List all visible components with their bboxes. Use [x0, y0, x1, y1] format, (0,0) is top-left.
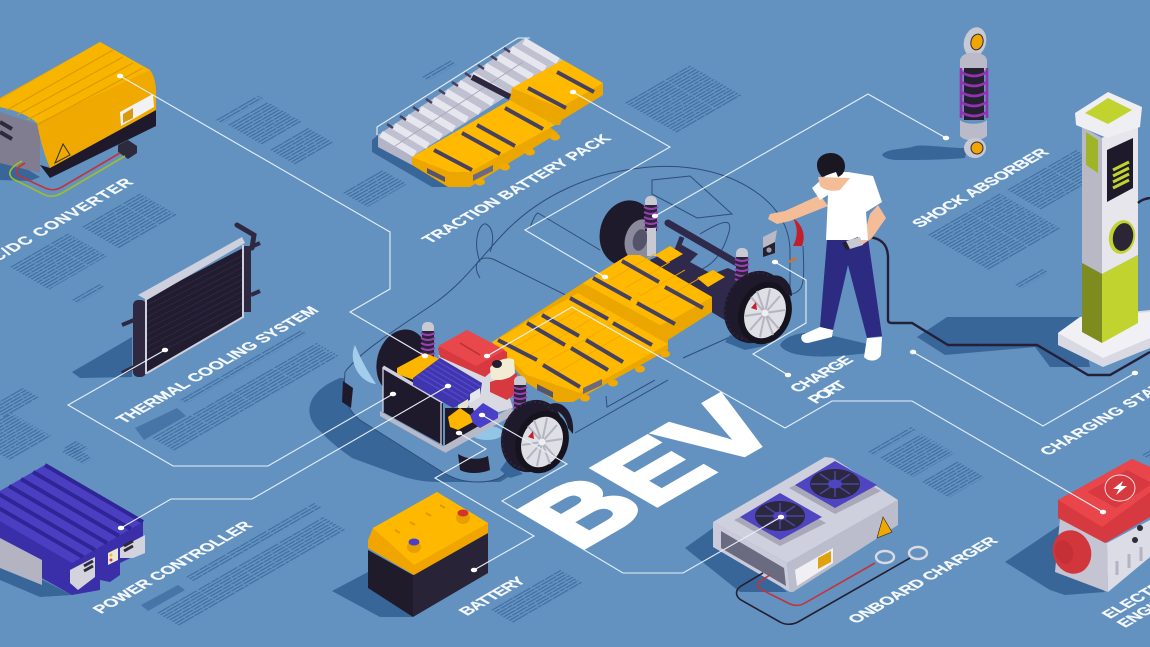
hair: [817, 153, 845, 177]
text block: left edge: [0, 388, 93, 464]
label: traction battery pack: TRACTION BATTERY PACK: [419, 132, 616, 246]
line: charge port: [753, 262, 806, 375]
rear far shock: [644, 196, 658, 231]
text block: shock absorber: [928, 150, 1111, 288]
fan 1: [734, 493, 826, 546]
line: power controller: [121, 386, 448, 528]
charger shadow: [685, 528, 787, 592]
pants: [820, 238, 882, 338]
warning icon: [55, 144, 70, 163]
wheel: rear far: [592, 194, 662, 272]
wheel: front near: [490, 390, 578, 482]
text block: traction battery pack: [625, 66, 742, 133]
cells: [378, 38, 563, 165]
converter shadow: [0, 153, 40, 181]
battery: [332, 492, 488, 617]
label: shock absorber: SHOCK ABSORBER: [909, 146, 1054, 230]
converter side: [0, 112, 40, 173]
cable rings: [876, 551, 894, 563]
wheel: rear near: [713, 261, 801, 353]
engine shadow: [1005, 525, 1105, 595]
pale floor under chassis: [471, 426, 503, 440]
connector dots: [117, 74, 1138, 572]
ribs: [0, 465, 143, 557]
traction battery pack: [372, 38, 603, 187]
pillar left: [1082, 127, 1102, 274]
power controller: [0, 465, 145, 597]
orange reflector: [789, 258, 796, 262]
label: thermal cooling system: THERMAL COOLING SYSTEM: [113, 304, 323, 426]
car shadow: [309, 378, 520, 482]
pack bars: [498, 261, 703, 387]
battery lid: [368, 492, 488, 575]
left green strip: [1086, 132, 1098, 173]
far arm: [768, 195, 828, 224]
shock absorber: [882, 25, 990, 160]
lid plate: [1087, 470, 1150, 508]
bottom eye: [964, 138, 986, 158]
station cap: [1075, 92, 1142, 138]
terminal blue: [407, 538, 421, 553]
line: battery: [435, 433, 534, 570]
green lower: [1082, 263, 1102, 343]
car rear line: [792, 246, 804, 294]
traction pack in chassis: [492, 254, 712, 402]
battery case: [368, 550, 413, 617]
person: [768, 153, 886, 361]
screen: [1107, 138, 1133, 202]
cylinder: [964, 68, 984, 120]
car outline: [344, 166, 790, 482]
line: traction battery pack: [525, 92, 670, 277]
person shadow: [780, 333, 872, 357]
plug: [842, 237, 863, 250]
text block: electric engine: [1142, 448, 1150, 458]
line: thermal cooling: [68, 350, 393, 466]
station base: [1058, 310, 1150, 367]
sticker: [795, 548, 833, 586]
pack bumps: [580, 350, 670, 402]
charging station: [1058, 92, 1150, 367]
connectors: [70, 557, 95, 590]
label: power controller: POWER CONTROLLER: [90, 519, 257, 616]
chassis group: [369, 194, 801, 482]
text block: power controller: [141, 503, 347, 626]
line: charging station: [913, 352, 1135, 426]
charge port hardware: [763, 218, 804, 294]
rear frame: [650, 223, 750, 322]
casing bumps: [475, 134, 560, 186]
near arm: [854, 205, 886, 245]
neck and face: [818, 177, 850, 191]
text block: DC/DC converter lower: [10, 194, 178, 304]
title: BEV: BEV: [493, 382, 805, 563]
bracket arms: [122, 243, 260, 373]
label: charge port: PORT: [805, 379, 852, 406]
line: shock absorber: [655, 94, 946, 216]
port flap: [763, 230, 777, 250]
shock shadow: [882, 145, 967, 160]
fan 2: [789, 461, 881, 514]
rear near shock: [735, 248, 749, 283]
coil: [961, 68, 987, 118]
front converter block: [397, 353, 442, 380]
pack shadow: [372, 135, 448, 187]
radiator shadow: [72, 337, 132, 378]
line: electric engine: [487, 307, 1103, 512]
car bottom grille: [458, 454, 490, 473]
wheel floor shadows: [500, 335, 770, 478]
label: onboard charger: ONBOARD CHARGER: [845, 535, 1003, 626]
yellow casing: [412, 60, 603, 187]
text block: upper middle left: [216, 60, 457, 207]
tail lamp: [793, 218, 804, 246]
engine body: [1055, 518, 1108, 592]
converter base: [40, 110, 156, 178]
casing connectors: [427, 168, 445, 182]
purple block: [470, 403, 498, 428]
pipe: [237, 225, 254, 248]
red knob: [1047, 525, 1097, 579]
converter body: [0, 42, 156, 168]
left tank: [133, 300, 146, 377]
line: onboard charger: [482, 415, 781, 573]
plug: [118, 140, 137, 159]
car front grille: [342, 381, 353, 408]
frame: [146, 245, 243, 374]
station shadow: [917, 317, 1090, 367]
upper cap: [960, 52, 987, 70]
label: battery: BATTERY: [456, 575, 531, 618]
port socket: [763, 242, 775, 257]
electric engine: [1005, 459, 1150, 595]
label: charge port: CHARGE: [787, 354, 858, 395]
left shoe: [801, 327, 833, 343]
pillar front: [1102, 120, 1138, 274]
converter sticker: [120, 94, 154, 126]
text block: onboard charger: [868, 427, 984, 498]
DC/DC converter: [0, 42, 156, 196]
indicator panel: [108, 548, 118, 565]
bolt icon: [1105, 475, 1135, 501]
cable behind station: [1138, 198, 1150, 203]
front fender: [548, 403, 573, 434]
rear fender: [767, 275, 792, 296]
lower cap: [960, 120, 987, 140]
onboard charger: [685, 457, 927, 624]
cables: [736, 558, 910, 624]
casing bars: [434, 72, 594, 170]
car headlight: [353, 345, 376, 384]
battery shadow: [332, 572, 413, 617]
radiator: [72, 225, 260, 378]
compartment: [445, 408, 480, 446]
right tank: [243, 246, 251, 312]
connector lines: [68, 76, 1135, 573]
rear far strut: [647, 228, 656, 256]
charging cable: [868, 237, 1150, 375]
terminal red: [456, 510, 470, 524]
socket: [1106, 218, 1138, 256]
central white body: [438, 355, 513, 416]
line: DC/DC converter: [120, 76, 425, 356]
charger faces: [713, 522, 790, 592]
outline bracket: [377, 38, 530, 135]
body: [0, 465, 143, 595]
text block: battery: [491, 570, 584, 624]
front radiator: [380, 367, 444, 452]
engine cover: [1058, 459, 1150, 543]
top face: [0, 465, 143, 563]
tank: [490, 358, 517, 400]
warning icon: [877, 517, 892, 538]
right shoe: [864, 337, 882, 361]
top eye: [960, 25, 990, 59]
inverter block: [413, 358, 482, 413]
pack connectors: [537, 384, 553, 398]
side panel: [0, 538, 42, 585]
platform tray: [442, 408, 517, 453]
car body fill: [344, 330, 520, 482]
shirt: [812, 172, 882, 240]
front near shock: [513, 376, 527, 411]
wheel: front far: [369, 324, 435, 400]
core: [147, 248, 243, 372]
small battery in chassis: [448, 408, 473, 430]
bolts: [1137, 525, 1143, 531]
cables: [16, 153, 120, 190]
red unit: [438, 330, 507, 377]
text block: thermal cooling system: [64, 330, 340, 455]
controller shadow: [0, 558, 72, 597]
front far shock: [421, 322, 435, 357]
